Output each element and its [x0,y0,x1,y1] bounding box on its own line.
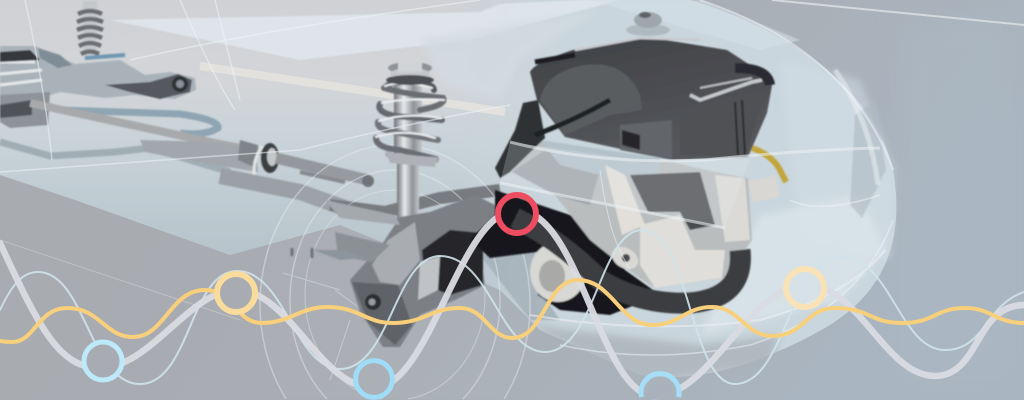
output shaft [276,158,368,180]
top mount [386,62,434,85]
inner damper [394,85,422,160]
rear control arm [0,46,196,100]
road stripe seen through car [200,66,505,112]
exhaust and drive rods [0,103,500,212]
yellow wave [0,280,1024,342]
ring marker: blue center [356,361,392,397]
lower tube [220,176,345,208]
bearing ring [254,143,279,182]
muffler body [140,140,258,172]
thick lavender wave [0,210,1024,396]
ring marker: yellow right [786,269,824,307]
vibration waves [0,210,1024,396]
dark engine cover [530,37,773,160]
engine assembly [470,12,786,315]
lower dark frame and pulley area [470,190,660,315]
front suspension strut [292,62,498,347]
knuckle and hub [350,195,498,347]
translucent body streaks [0,0,893,355]
rear coil spring [77,1,103,54]
lower control arm [335,232,390,262]
yellow wiring hose [752,148,786,182]
dark left side [495,100,545,178]
ring marker: red [498,195,536,233]
ring marker: blue right [641,374,679,397]
translucent glass band over engine [500,142,750,228]
low exhaust pipe [0,142,230,172]
spring seat [386,152,436,167]
pulley [530,242,586,302]
silver engine block [510,140,752,288]
thin light-blue wave [0,230,1024,384]
strut shaft [397,160,419,255]
engine top mount [626,12,670,36]
coil spring [376,82,444,160]
rear suspension assembly [0,1,196,128]
tie rod [330,190,500,212]
wheel outline [260,145,530,399]
ring marker: light blue left [84,342,122,380]
long tube rod [30,103,262,152]
black coolant hose [515,218,740,303]
ring marker: yellow left [217,274,255,312]
anti-roll bar [60,110,218,134]
